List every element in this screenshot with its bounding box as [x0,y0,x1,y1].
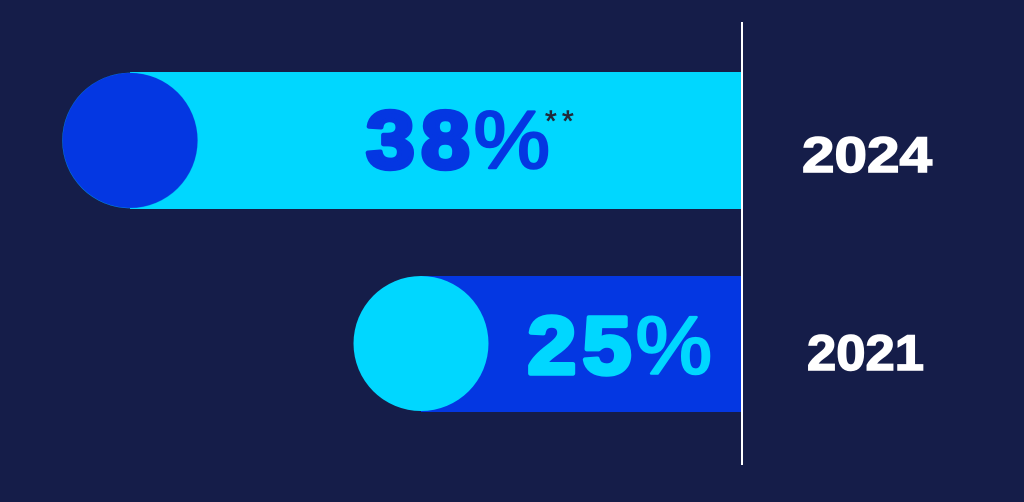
value: 25% [528,299,712,391]
value: 25%: 5 [582,299,631,391]
axis line [741,22,743,465]
footnote marker: ** [545,105,574,138]
value: 38%: 3 [366,94,415,185]
label: 2021: 2021 [807,325,924,381]
value: 25%: % [636,299,712,391]
value: 25%: 2 [528,299,576,391]
bar: 2024 [62,72,742,209]
icon: circle cap 2024 [62,73,198,208]
label: 2024: 2024 [802,127,932,183]
value: 38% [366,94,550,186]
bar: 2021 [354,276,742,412]
icon: circle cap 2021 [354,276,488,411]
value: 38%: 8 [421,94,470,185]
value: 38%: % [474,94,550,186]
